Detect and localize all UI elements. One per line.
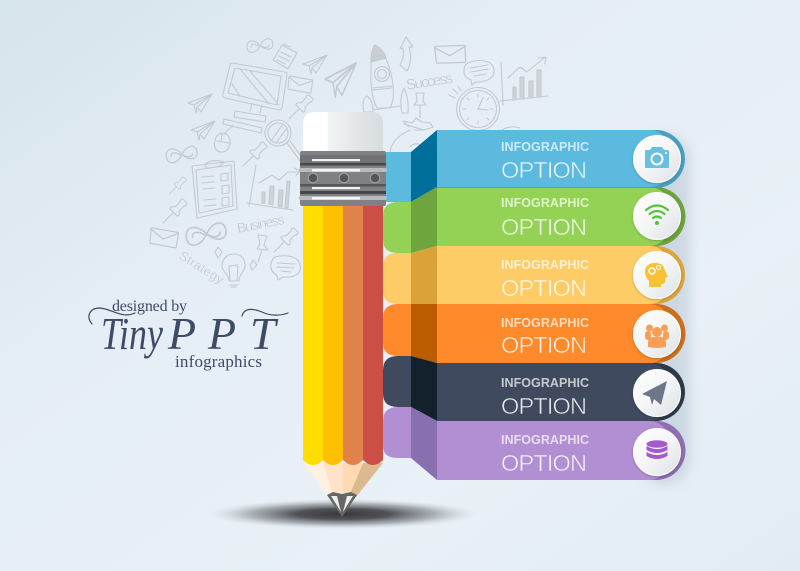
- option band: soft shadows: [640, 134, 690, 484]
- doodle: magnifier: [265, 120, 303, 162]
- folded tabs behind pencil: [383, 130, 437, 480]
- doodle: word strategy: Strategy: [176, 248, 227, 287]
- doodle: paper planes: [188, 55, 356, 140]
- tab 1: blue: [385, 152, 411, 202]
- icon: database: [646, 440, 668, 459]
- option 2: green band: [437, 187, 686, 246]
- logo wordmark: Tiny PPT: T: [250, 308, 279, 359]
- doodle: rocket: [363, 45, 408, 113]
- tab 2: green: [383, 202, 411, 253]
- doodle: bar chart left: [247, 165, 300, 210]
- logo wordmark: Tiny PPT: P: [167, 308, 196, 359]
- doodle: mouse: [215, 125, 233, 152]
- option 6: purple band: OPTION: [501, 450, 587, 476]
- fold 4: orange: [411, 304, 437, 363]
- option 6: purple band: [437, 421, 686, 480]
- option 4: orange band: [437, 304, 686, 363]
- fold 5: navy: [411, 356, 437, 421]
- logo: designed by TinyPPT infographics: [89, 298, 288, 371]
- option 5: navy band: OPTION: [501, 393, 587, 419]
- option 1: blue band: [437, 130, 685, 188]
- doodle: light bulb: [222, 254, 245, 287]
- doodle: sparkles and upright pin: [215, 235, 268, 270]
- option 3: yellow band: INFOGRAPHIC: [501, 258, 589, 272]
- doodle: small upright pin: [414, 93, 426, 118]
- doodle: envelopes: [150, 40, 468, 248]
- pencil: [299, 112, 387, 517]
- doodle: note: [273, 44, 297, 69]
- pencil stripes: [303, 206, 383, 465]
- doodle: speech bubble right: [464, 60, 494, 85]
- fold 1: blue: [411, 130, 437, 202]
- doodle: word business: Business: [236, 211, 286, 236]
- doodle: clock: [449, 86, 500, 130]
- doodle: money bag far: [502, 127, 520, 130]
- doodle: monitor: [223, 63, 287, 133]
- option 5: navy band: [437, 363, 685, 421]
- doodle: money bag: [390, 118, 433, 152]
- option 3: yellow band: [437, 246, 685, 304]
- doodle: pins: [163, 95, 313, 252]
- doodle: infinity loops: [165, 38, 274, 246]
- icon: camera: [645, 147, 669, 168]
- logo wordmark: Tiny PPT: [89, 308, 288, 359]
- icon: paper plane: [642, 381, 667, 405]
- option 2: green band: INFOGRAPHIC: [501, 196, 589, 210]
- doodle: bar chart right: [500, 57, 548, 105]
- tab 4: orange: [383, 304, 411, 356]
- option 5: navy band: INFOGRAPHIC: [501, 376, 589, 390]
- fold 2: green: [411, 187, 437, 253]
- logo wordmark: Tiny PPT: Tiny: [101, 308, 163, 359]
- option 6: purple band: INFOGRAPHIC: [501, 433, 589, 447]
- icon: people group: [645, 324, 669, 348]
- pencil ground shadow: [209, 499, 477, 529]
- doodle: curved arrow: [400, 37, 413, 71]
- option 4: orange band: OPTION: [501, 332, 587, 358]
- doodle: word success: Success: [405, 70, 454, 94]
- option 1: blue band: OPTION: [501, 157, 587, 183]
- logo line: designed by: designed by: [112, 298, 187, 315]
- tab 3: yellow: [383, 253, 411, 304]
- fold 6: purple: [411, 407, 437, 480]
- doodle illustrations: [150, 37, 548, 287]
- option 3: yellow band: OPTION: [501, 275, 587, 301]
- tab 6: purple: [383, 407, 411, 458]
- pencil metal ferrule: [299, 151, 387, 206]
- tab 5: navy: [383, 356, 411, 407]
- logo line: infographics: infographics: [175, 352, 262, 371]
- pencil wood tip: [304, 463, 383, 497]
- icon: wifi: [646, 206, 668, 225]
- doodle: speech bubble left: [271, 256, 300, 280]
- fold 3: yellow: [411, 246, 437, 304]
- option 4: orange band: INFOGRAPHIC: [501, 316, 589, 330]
- doodle: clipboard: [192, 160, 237, 218]
- pencil eraser: [303, 112, 383, 155]
- option 1: blue band: INFOGRAPHIC: [501, 140, 589, 154]
- pencil lead: [327, 492, 357, 517]
- option 2: green band: OPTION: [501, 214, 587, 240]
- icon: head with gears: [645, 263, 668, 287]
- logo wordmark: Tiny PPT: P: [207, 308, 236, 359]
